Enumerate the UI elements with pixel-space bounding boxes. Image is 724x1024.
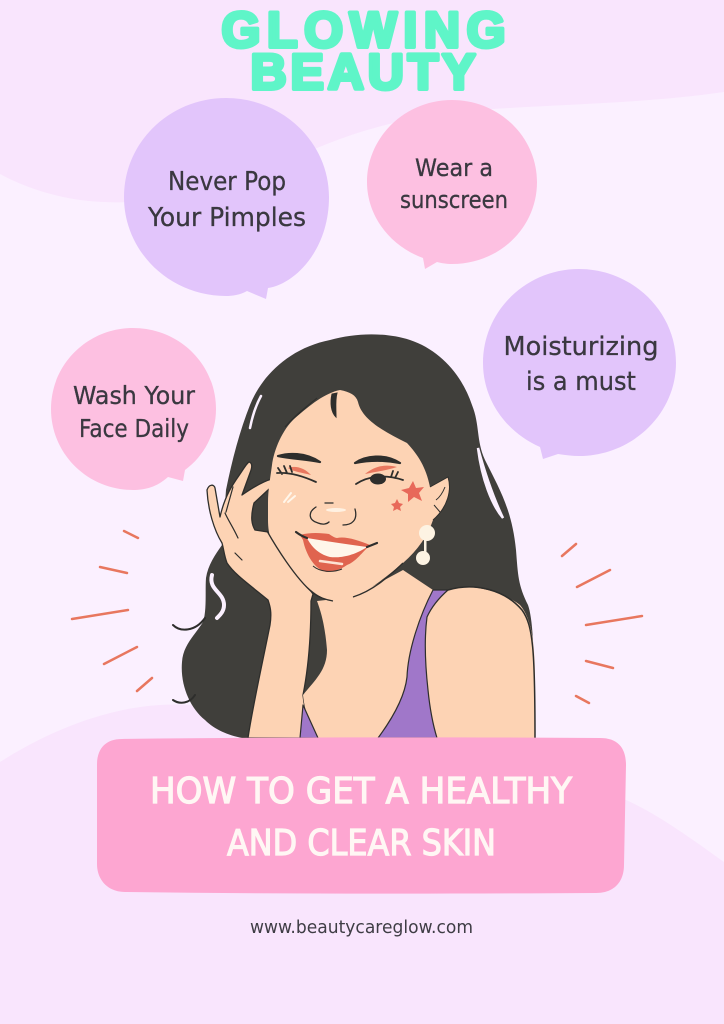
banner [97, 737, 626, 894]
nose [310, 503, 356, 525]
right eye [356, 471, 403, 484]
mouth [296, 532, 377, 572]
speech bubble: wear a sunscreen: sunscreen [400, 186, 508, 214]
title: BEAUTY [250, 44, 476, 100]
left winking eye [277, 466, 316, 482]
earring [416, 525, 435, 565]
title [222, 2, 506, 100]
jaw line [267, 531, 403, 601]
ear detail [430, 477, 449, 520]
hair gaps [211, 396, 503, 618]
speech bubble: wash your face daily [51, 328, 216, 490]
woman illustration [173, 334, 535, 738]
website url: www.beautycareglow.com [250, 917, 473, 938]
hand and arm [207, 462, 318, 738]
torso and shoulder [303, 570, 535, 738]
finger lines [225, 487, 242, 560]
speech bubble: wear a sunscreen [367, 100, 537, 269]
hair curl tips [173, 618, 205, 703]
speech bubble: moisturizing is a must: Moisturizing [504, 332, 658, 362]
speech bubble: wash your face daily: Face Daily [79, 414, 189, 443]
eye shadow [288, 466, 397, 475]
face [268, 390, 449, 601]
stars on cheek [391, 481, 424, 511]
banner: HOW TO GET A HEALTHY [150, 771, 573, 812]
shoulder outline [448, 587, 535, 738]
speech bubble: moisturizing is a must: is a must [526, 367, 636, 397]
banner: AND CLEAR SKIN [227, 823, 496, 864]
rays left [72, 531, 152, 691]
eyebrows [278, 454, 400, 463]
speech bubble: never pop your pimples: Your Pimples [147, 203, 306, 233]
speech bubble: never pop your pimples: Never Pop [168, 167, 286, 197]
cheek shine [284, 493, 295, 502]
title: GLOWING [222, 2, 506, 58]
speech bubble: never pop your pimples [124, 98, 329, 299]
hair lock on forehead [285, 393, 337, 427]
speech bubble: moisturizing is a must [483, 269, 676, 459]
hair back [182, 334, 534, 738]
speech bubble: wash your face daily: Wash Your [73, 381, 196, 410]
rays right [562, 544, 642, 703]
speech bubble: wear a sunscreen: Wear a [415, 154, 493, 182]
purple dress [300, 590, 448, 738]
